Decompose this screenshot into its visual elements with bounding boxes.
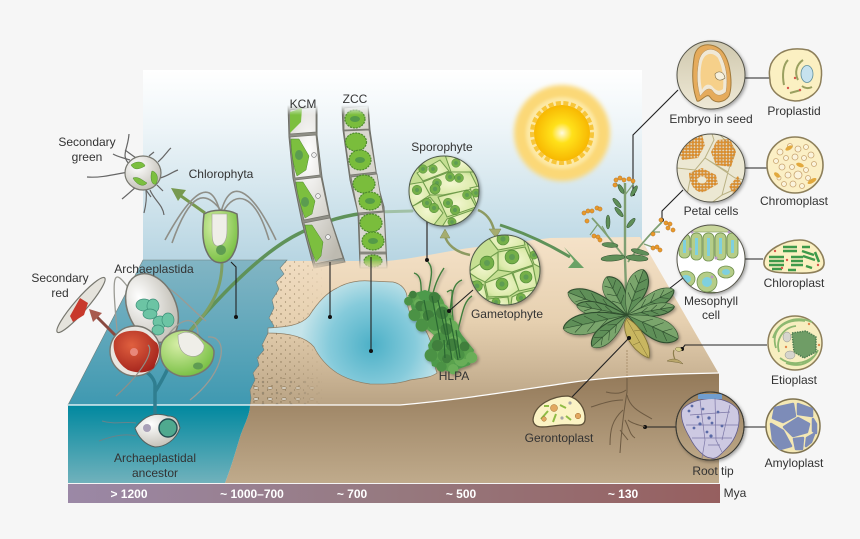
label: mesophyll cell: Mesophyll (684, 294, 738, 308)
label: amyloplast: Amyloplast (765, 456, 824, 470)
arrow: to secondary green (171, 188, 205, 213)
circle: mesophyll cell (677, 225, 745, 302)
leader: gerontoplast (572, 336, 631, 397)
arrow: to flowering plants (564, 247, 584, 268)
circle: root tip (676, 392, 744, 460)
timeline bar: > 1200 (110, 487, 148, 501)
label: KCM: KCM (290, 97, 316, 111)
label: HLPA: HLPA (439, 369, 469, 383)
label: ZCC: ZCC (343, 92, 368, 106)
sun (514, 85, 610, 181)
label: sporophyte: Sporophyte (411, 140, 473, 154)
pond (268, 281, 437, 384)
surface edge (68, 373, 719, 405)
leader: gametophyte (447, 290, 473, 313)
sky panel (143, 70, 642, 262)
timeline bar: ~ 500 (446, 487, 477, 501)
moss HLPA (404, 262, 477, 374)
circle: petal cells (677, 134, 745, 204)
green archaeplastid cell (160, 321, 221, 400)
label: proplastid: Proplastid (767, 104, 821, 118)
label: archaeplastidal ancestor: Archaeplastidal (114, 451, 196, 465)
plant (561, 176, 682, 378)
red archaeplastid cell (110, 326, 160, 396)
label: secondary green: green (72, 150, 102, 164)
chloroplast (764, 240, 824, 273)
earth front (225, 373, 719, 483)
gerontoplast (533, 396, 585, 427)
archaeplastidal ancestor (99, 414, 180, 447)
secondary red organism (52, 274, 110, 336)
circle: gametophyte cells (468, 232, 545, 312)
circle: embryo in seed (677, 41, 745, 109)
label: chlorophyta: Chlorophyta (189, 167, 254, 181)
green lineage arc (190, 211, 570, 331)
secondary green organism (87, 134, 178, 215)
label: chloroplast: Chloroplast (764, 276, 825, 290)
water surface (68, 260, 287, 405)
leader lines (231, 78, 770, 427)
etioplast (768, 316, 822, 370)
land surface (68, 237, 719, 405)
label: secondary red: Secondary (31, 271, 89, 285)
ZCC filament (342, 103, 387, 268)
sand banks (253, 261, 322, 404)
leader dots (234, 76, 732, 429)
label: mesophyll cell: cell (702, 308, 720, 322)
label: petal cells: Petal cells (684, 204, 738, 218)
label: secondary red: red (51, 286, 69, 300)
label: archaeplastidal ancestor: ancestor (132, 466, 178, 480)
arrow: to secondary red (89, 309, 115, 335)
label: gerontoplast: Gerontoplast (525, 431, 594, 445)
chromoplast (767, 137, 823, 193)
timeline bar (68, 484, 720, 503)
tree base (146, 364, 170, 420)
chlorophyta cell (165, 191, 276, 263)
label: secondary green: Secondary (58, 135, 116, 149)
timeline bar: ~ 700 (337, 487, 368, 501)
label: archaeplastida: Archaeplastida (114, 262, 194, 276)
water front (68, 405, 250, 483)
circle: sporophyte cells (405, 155, 484, 230)
proplastid (769, 49, 822, 101)
KCM filament (288, 102, 345, 268)
timeline bar: ~ 1000–700 (220, 487, 284, 501)
label: etioplast: Etioplast (771, 373, 818, 387)
etiolated seedling (667, 347, 683, 364)
label: gametophyte: Gametophyte (471, 307, 543, 321)
roots (591, 377, 652, 453)
label: chromoplast: Chromoplast (760, 194, 829, 208)
timeline unit: Mya (724, 486, 747, 500)
gray archaeplastid cell (114, 265, 206, 351)
label: root tip: Root tip (692, 464, 734, 478)
label: embryo in seed: Embryo in seed (669, 112, 753, 126)
arrows: life cycle (440, 210, 501, 255)
amyloplast (766, 399, 820, 453)
timeline bar: ~ 130 (608, 487, 639, 501)
